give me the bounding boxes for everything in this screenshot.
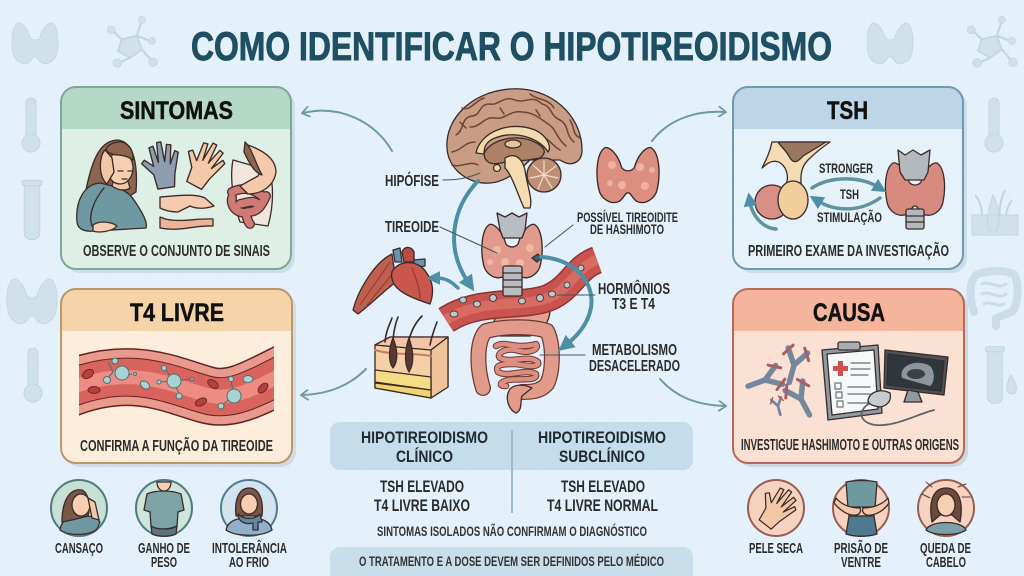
column: clínico: TSH ELEVADO	[380, 477, 464, 496]
trachea	[503, 266, 522, 296]
decorative medical icons	[7, 16, 1018, 403]
icon: pituitary	[755, 142, 830, 219]
icon: tired woman	[77, 140, 146, 232]
label: possível tireoidite de hashimoto: POSSÍVEL TIREOIDITE	[577, 209, 678, 225]
label: ganho de peso: GANHO DE	[138, 540, 190, 557]
column: clínico	[361, 428, 488, 515]
label: possível tireoidite de hashimoto: DE HASHIMOTO	[590, 221, 664, 237]
panel: causa	[733, 289, 968, 467]
stomach	[494, 303, 550, 336]
labels: tsh loop: TSH	[840, 186, 859, 202]
labels: tsh loop: STRONGER	[819, 160, 873, 176]
symptom: intolerância ao frio	[212, 480, 287, 571]
icon: ultrasound monitor	[884, 350, 948, 402]
label: intolerância ao frio: INTOLERÂNCIA	[212, 539, 287, 557]
column: subclínico	[538, 428, 666, 515]
icon: dry skin	[160, 217, 213, 229]
label: hormônios t3 e t4: HORMÔNIOS	[598, 279, 670, 298]
label: hormônios t3 e t4: T3 E T4	[612, 296, 655, 313]
arrow: to causa	[660, 379, 725, 406]
hashimoto thyroid	[597, 148, 659, 203]
arrow: pituitary to bloodstream	[454, 181, 478, 282]
icon: horizontal hand	[160, 195, 214, 212]
intestines	[478, 327, 552, 413]
symptom: ganho de peso	[136, 480, 192, 571]
thyroid at neck	[482, 213, 542, 278]
label: ganho de peso	[138, 540, 190, 571]
heading: tsh: TSH	[827, 97, 868, 125]
note: tratamento	[330, 547, 693, 576]
label: hormônios t3 e t4	[598, 279, 670, 313]
comparison table	[330, 422, 693, 515]
label: cansaço: CANSAÇO	[55, 540, 103, 557]
caption: tsh: PRIMEIRO EXAME DA INVESTIGAÇÃO	[748, 242, 949, 260]
labels: tsh loop: STIMULAÇÃO	[817, 208, 882, 225]
arrow: hormones to metabolism	[541, 257, 591, 344]
heading: causa: CAUSA	[813, 299, 885, 327]
brain	[447, 89, 582, 208]
icon: dry hand	[176, 135, 231, 193]
labels: tsh loop	[817, 160, 882, 225]
label: possível tireoidite de hashimoto	[577, 209, 678, 237]
icon: thyroid with larynx	[885, 150, 945, 229]
icon: gloved hand	[139, 140, 183, 191]
panel: sintomas	[61, 87, 295, 273]
column: subclínico: HIPOTIREOIDISMO	[538, 428, 666, 447]
title: COMO IDENTIFICAR O HIPOTIREOIDISMO	[191, 25, 832, 69]
blood vessel with T4 molecules	[60, 358, 295, 409]
label: tireoide: TIREOIDE	[385, 219, 439, 236]
arrow: to tsh	[652, 112, 725, 141]
leader lines	[440, 173, 595, 355]
note: sintomas isolados: SINTOMAS ISOLADOS NÃO CONFIRMAM O DIAGNÓSTICO	[377, 522, 647, 539]
icon: ultrasound probe	[862, 391, 934, 425]
label: intolerância ao frio	[212, 539, 287, 571]
column: clínico: HIPOTIREOIDISMO	[361, 428, 488, 447]
label: queda de cabelo: QUEDA DE	[920, 540, 971, 557]
label: prisão de ventre: VENTRE	[841, 554, 881, 571]
column: subclínico: TSH ELEVADO	[561, 477, 645, 496]
arrow: to t4 livre	[302, 369, 366, 395]
column: clínico: CLÍNICO	[396, 447, 453, 466]
label: queda de cabelo	[920, 540, 971, 571]
label: ganho de peso: PESO	[151, 554, 177, 571]
label: metabolismo desacelerado: METABOLISMO	[592, 342, 677, 359]
label: intolerância ao frio: AO FRIO	[229, 554, 269, 571]
blood vessel	[446, 260, 597, 320]
label: prisão de ventre	[834, 539, 888, 571]
heading: sintomas: SINTOMAS	[120, 97, 233, 125]
symptom: queda de cabelo	[918, 480, 974, 571]
arrow: to heart	[436, 278, 458, 288]
icon: clipboard	[822, 342, 882, 420]
symptom: cansaço	[51, 480, 107, 557]
icon: antibodies	[744, 343, 821, 421]
label: prisão de ventre: PRISÃO DE	[834, 539, 888, 557]
skin cross-section	[375, 316, 448, 398]
label: metabolismo desacelerado: DESACELERADO	[589, 358, 680, 375]
label: hipófise: HIPÓFISE	[385, 171, 439, 190]
panel: t4 livre	[60, 289, 296, 467]
label: pele seca: PELE SECA	[749, 540, 803, 557]
column: subclínico: SUBCLÍNICO	[559, 447, 645, 466]
icon: abdomen with intestine	[232, 142, 276, 226]
label: metabolismo desacelerado	[589, 342, 680, 375]
caption: sintomas: OBSERVE O CONJUNTO DE SINAIS	[83, 243, 270, 260]
central anatomy illustration	[353, 89, 659, 413]
label: queda de cabelo: CABELO	[926, 554, 966, 571]
heart and muscle	[353, 247, 433, 314]
arrows: tsh loop	[750, 179, 880, 229]
heading: t4 livre: T4 LIVRE	[130, 299, 224, 327]
caption: t4 livre: CONFIRMA A FUNÇÃO DA TIREOIDE	[80, 437, 273, 455]
panel: tsh	[733, 87, 967, 273]
column: subclínico: T4 LIVRE NORMAL	[547, 496, 658, 515]
arrow: to sintomas	[303, 111, 392, 151]
column: clínico: T4 LIVRE BAIXO	[374, 496, 470, 515]
symptom: prisão de ventre	[833, 480, 889, 571]
symptom: pele seca	[748, 480, 804, 557]
note: tratamento: O TRATAMENTO E A DOSE DEVEM SER DEFINIDOS PELO MÉDICO	[359, 553, 664, 569]
